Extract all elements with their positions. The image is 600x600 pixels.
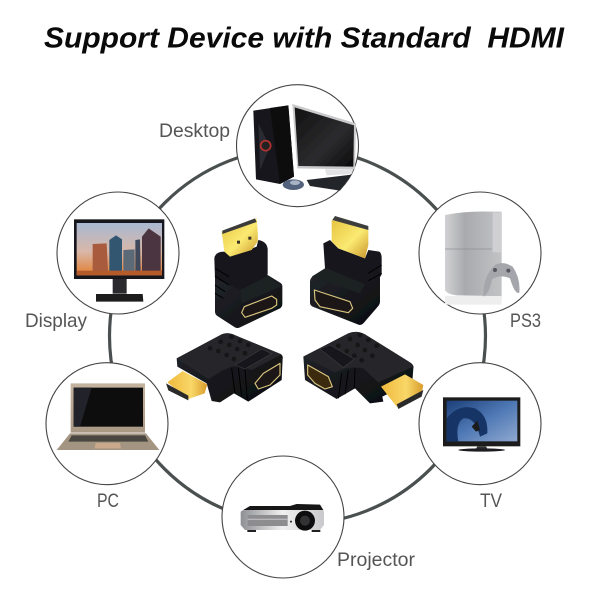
label: Projector: Projector [337,549,416,571]
icon: game console and controller [445,211,520,305]
node: PS3 [419,192,541,314]
icon: desktop computer [253,104,356,191]
node: Desktop [236,85,358,207]
icon: laptop [57,383,159,450]
label: Display: Display [25,310,87,332]
label: TV: TV [480,490,502,512]
adapter: top right [310,216,382,325]
label: PC: PC [97,490,119,512]
title: Support Device with Standard HDMI [44,22,565,54]
icon: projector [241,504,324,532]
icon: monitor with city skyline [74,219,164,302]
node: Display [57,192,179,314]
adapter: bottom right [303,332,423,409]
adapter: bottom left [166,333,283,402]
icon: flat screen TV [443,397,520,452]
adapter: top left [214,218,282,328]
label: PS3: PS3 [510,310,541,332]
node: TV [419,363,541,485]
node: PC [46,363,168,485]
node: Projector [222,456,344,578]
label: Desktop: Desktop [159,120,230,142]
HDMI adapters group [166,216,423,409]
connection ring [110,148,486,524]
